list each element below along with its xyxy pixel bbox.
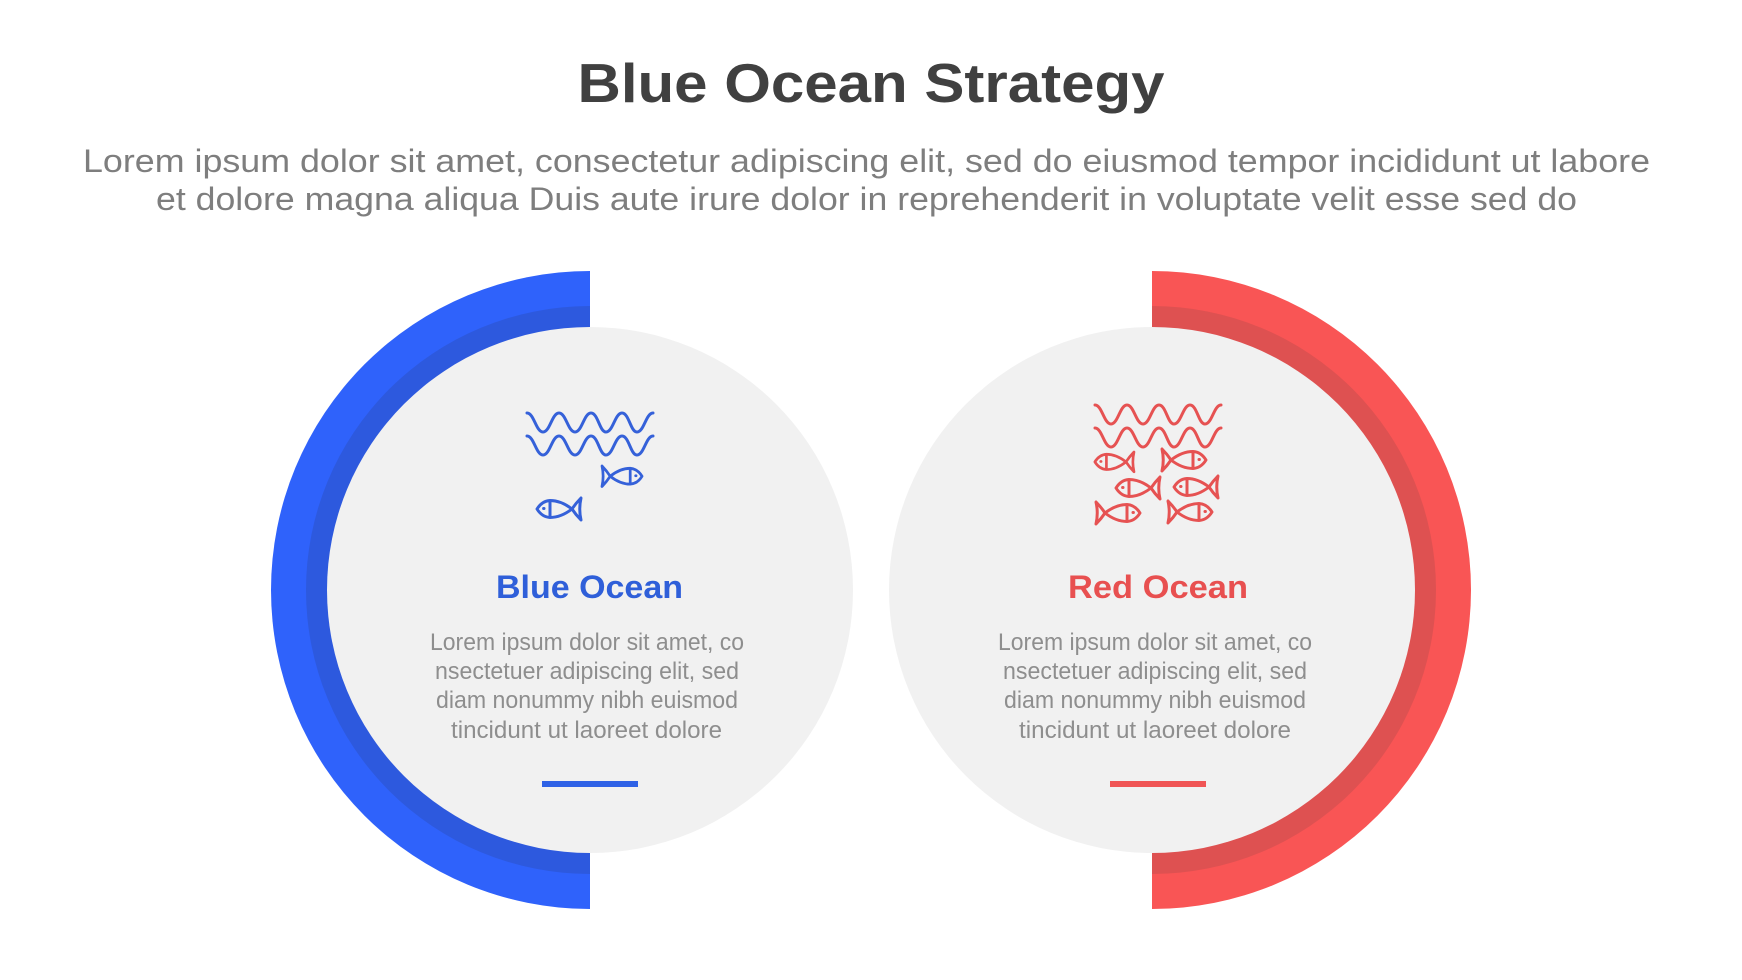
- subtitle text: et dolore magna aliqua Duis aute irure dolor in reprehenderit in voluptate velit esse sed do: [156, 181, 1577, 217]
- panel: blue ocean: [271, 271, 853, 909]
- icon: blue ocean waves and fish: [527, 413, 653, 520]
- blue accent bar: [542, 781, 638, 787]
- panel: red ocean: [889, 271, 1471, 909]
- subtitle text: [83, 143, 1650, 217]
- red outer half ring: [1152, 271, 1471, 909]
- red ocean body text: nsectetuer adipiscing elit, sed: [1003, 658, 1307, 685]
- blue inner half ring: [306, 306, 590, 874]
- blue ocean body text: diam nonummy nibh euismod: [436, 687, 738, 714]
- title: Blue Ocean Strategy: [578, 52, 1165, 114]
- subtitle text: Lorem ipsum dolor sit amet, consectetur adipiscing elit, sed do eiusmod tempor incididunt ut labore: [83, 143, 1650, 179]
- red ocean body text: Lorem ipsum dolor sit amet, co: [998, 629, 1312, 656]
- blue ocean body text: tincidunt ut laoreet dolore: [451, 717, 722, 744]
- blue panel grey circle: [327, 327, 853, 853]
- blue ocean body text: Lorem ipsum dolor sit amet, co: [430, 629, 744, 656]
- red ocean body text: diam nonummy nibh euismod: [1004, 687, 1306, 714]
- red panel grey circle: [889, 327, 1415, 853]
- red ocean heading: Red Ocean: [1068, 569, 1248, 605]
- blue ocean body text: nsectetuer adipiscing elit, sed: [435, 658, 739, 685]
- blue ocean heading: Blue Ocean: [496, 569, 683, 605]
- red accent bar: [1110, 781, 1206, 787]
- red ocean body text: tincidunt ut laoreet dolore: [1019, 717, 1291, 744]
- red ocean body text: [998, 629, 1312, 744]
- blue outer half ring: [271, 271, 590, 909]
- red inner half ring: [1152, 306, 1436, 874]
- icon: red ocean waves and fish: [1095, 405, 1221, 524]
- blue ocean body text: [430, 629, 744, 744]
